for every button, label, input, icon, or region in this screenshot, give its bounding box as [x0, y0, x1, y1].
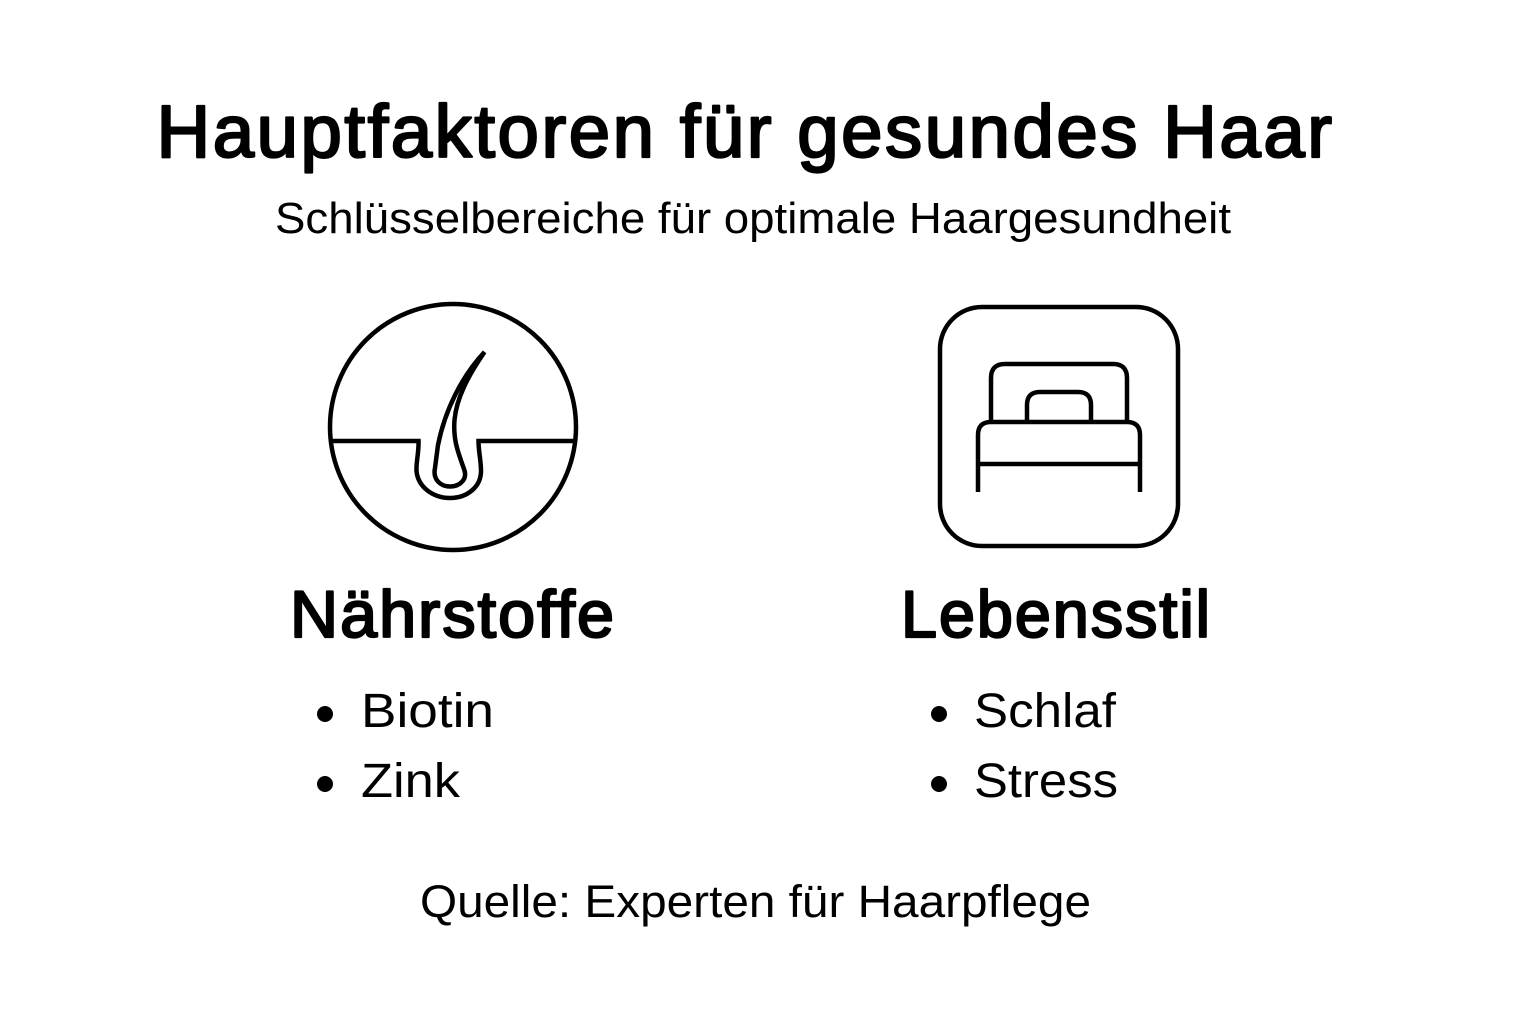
list: Lebensstil: Stress: [974, 755, 1118, 808]
list: Nährstoffe: Zink: [361, 755, 461, 808]
heading: Lebensstil: Lebensstil: [901, 577, 1212, 651]
list: Lebensstil: [931, 685, 1118, 808]
heading: Nährstoffe: Nährstoffe: [290, 577, 616, 651]
list: Nährstoffe: Biotin: [361, 685, 494, 738]
title: Hauptfaktoren für gesundes Haar: [156, 90, 1334, 173]
list: Nährstoffe: [317, 685, 494, 808]
icon: bed: [940, 307, 1178, 546]
subtitle: Schlüsselbereiche für optimale Haargesundheit: [275, 194, 1231, 243]
icon: hair follicle: [330, 304, 576, 550]
list: Lebensstil: Schlaf: [974, 685, 1117, 738]
source note: Quelle: Experten für Haarpflege: [420, 876, 1091, 927]
